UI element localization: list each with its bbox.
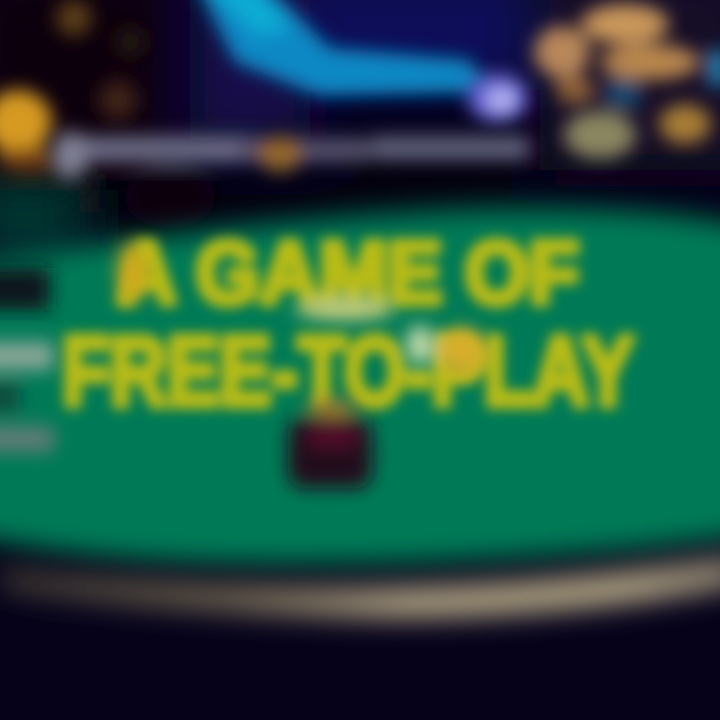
table: left side shadows and reflections — [0, 268, 54, 452]
icon: violet light orb — [468, 74, 528, 122]
icon: tan cluster upper right — [534, 4, 720, 159]
icon: dark cup on table — [288, 400, 372, 488]
highlights: pale glints across title — [118, 242, 486, 376]
decorative: silver band — [52, 131, 530, 228]
backdrop: upper room glow — [0, 0, 720, 250]
icon: warm lights left — [0, 0, 146, 172]
table rim: beige edge — [0, 556, 720, 618]
title: yellow headline: A GAME OF — [117, 223, 579, 322]
icon: cyan light streak — [195, 0, 490, 96]
table: green felt — [0, 208, 720, 564]
title: yellow headline — [62, 223, 634, 426]
